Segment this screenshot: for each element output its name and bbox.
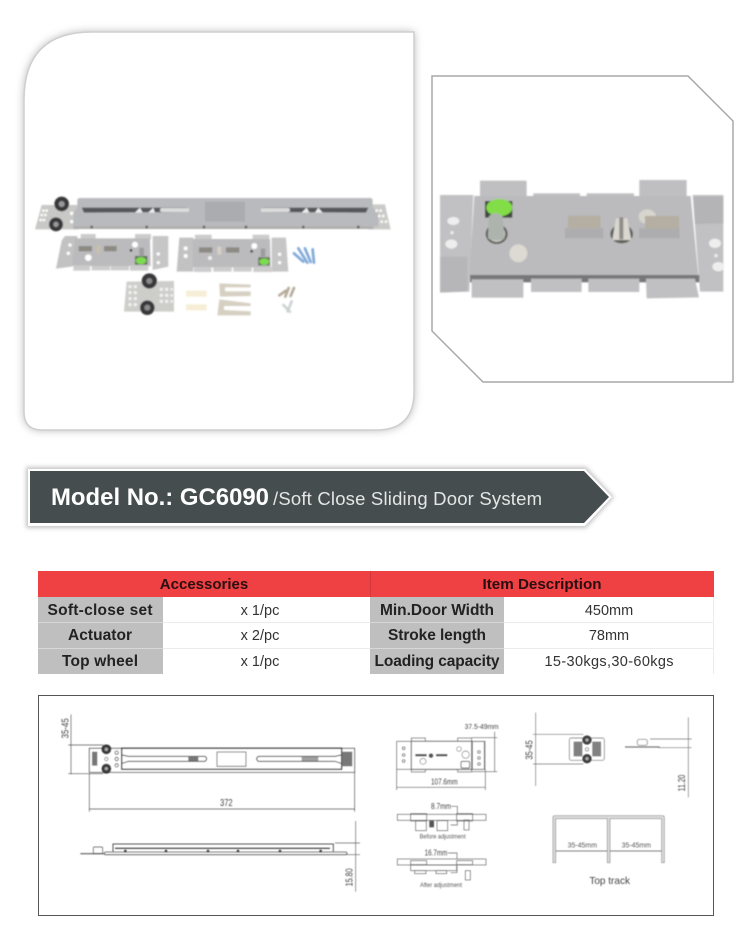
blue screws	[294, 248, 314, 263]
after adjustment profile	[397, 853, 486, 880]
top tabs	[480, 180, 687, 197]
silver screws	[279, 288, 294, 312]
track dimension labels: 35-45mm	[622, 843, 651, 850]
U brackets	[217, 283, 251, 315]
table row: actuator	[68, 627, 629, 644]
drawing: wheel bracket plan and side view	[524, 713, 692, 797]
dimension text 35-45: 35-45	[60, 718, 71, 738]
dimension labels: After adjustment	[420, 882, 462, 889]
drawing: top track section	[553, 816, 664, 887]
drawing: rail top view with dimensions	[60, 714, 355, 812]
dimension text 11.20: 11.20	[677, 774, 688, 791]
dimension labels: 16.7mm	[425, 848, 448, 857]
table row: top wheel: 15-30kgs,30-60kgs	[544, 654, 674, 670]
table header	[38, 571, 714, 597]
screw	[610, 217, 633, 243]
product name text: /Soft Close Sliding Door System	[273, 488, 542, 509]
clips	[565, 209, 680, 238]
table row: soft-close set: Soft-close set	[48, 602, 152, 619]
table row: actuator: Actuator	[68, 627, 132, 644]
table header: Item Description	[482, 576, 602, 593]
track dimension labels	[568, 843, 651, 887]
specification table	[38, 571, 714, 674]
panel: close-up photo	[432, 76, 733, 382]
banner: model number	[26, 467, 614, 528]
table row: soft-close set: x 1/pc	[241, 603, 279, 619]
top wheel bracket	[124, 273, 174, 315]
lower tabs	[470, 275, 699, 298]
panel: technical drawings	[38, 696, 714, 916]
dimension text 35-45: 35-45	[524, 740, 535, 760]
panel: product kit photo	[24, 32, 414, 430]
actuator right	[177, 235, 288, 272]
table row: soft-close set: Min.Door Width	[380, 602, 494, 619]
product kit parts	[35, 197, 391, 315]
table row: actuator: x 2/pc	[241, 628, 279, 644]
main rail	[35, 197, 391, 231]
actuator close-up	[440, 180, 724, 298]
side rails	[440, 195, 724, 293]
table row: soft-close set: 450mm	[585, 603, 633, 619]
drawing: actuator plan and adjustment views	[397, 722, 499, 889]
drawing: rail side view with dimensions	[80, 821, 360, 892]
main plate	[469, 196, 698, 275]
green wheel and pin	[485, 199, 512, 244]
track dimension labels: 35-45mm	[568, 843, 597, 850]
dimension text 372: 372	[220, 798, 233, 809]
dimension labels: 37.5-49mm	[465, 722, 499, 731]
model number text: Model No.: GC6090	[51, 484, 269, 511]
rivet	[509, 244, 527, 262]
table row: actuator: 78mm	[589, 628, 629, 644]
before adjustment profile	[397, 806, 486, 831]
table row: top wheel: Top wheel	[62, 653, 138, 670]
table row: top wheel	[62, 653, 674, 670]
dimension labels: 107.6mm	[431, 777, 458, 786]
table header: Accessories	[160, 576, 248, 593]
dimension text 15.80: 15.80	[344, 868, 355, 886]
actuator left	[56, 234, 168, 271]
table row: actuator: Stroke length	[388, 627, 486, 644]
table row: soft-close set	[48, 602, 633, 619]
dimension labels: 8.7mm	[431, 802, 451, 811]
track dimension labels: Top track	[589, 876, 631, 887]
table row: top wheel: x 1/pc	[241, 654, 279, 670]
label cells	[38, 597, 714, 674]
plastic anchors	[186, 291, 207, 310]
table row: top wheel: Loading capacity	[374, 653, 500, 670]
dimension labels: Before adjustment	[420, 833, 466, 840]
dimension labels	[420, 722, 499, 889]
